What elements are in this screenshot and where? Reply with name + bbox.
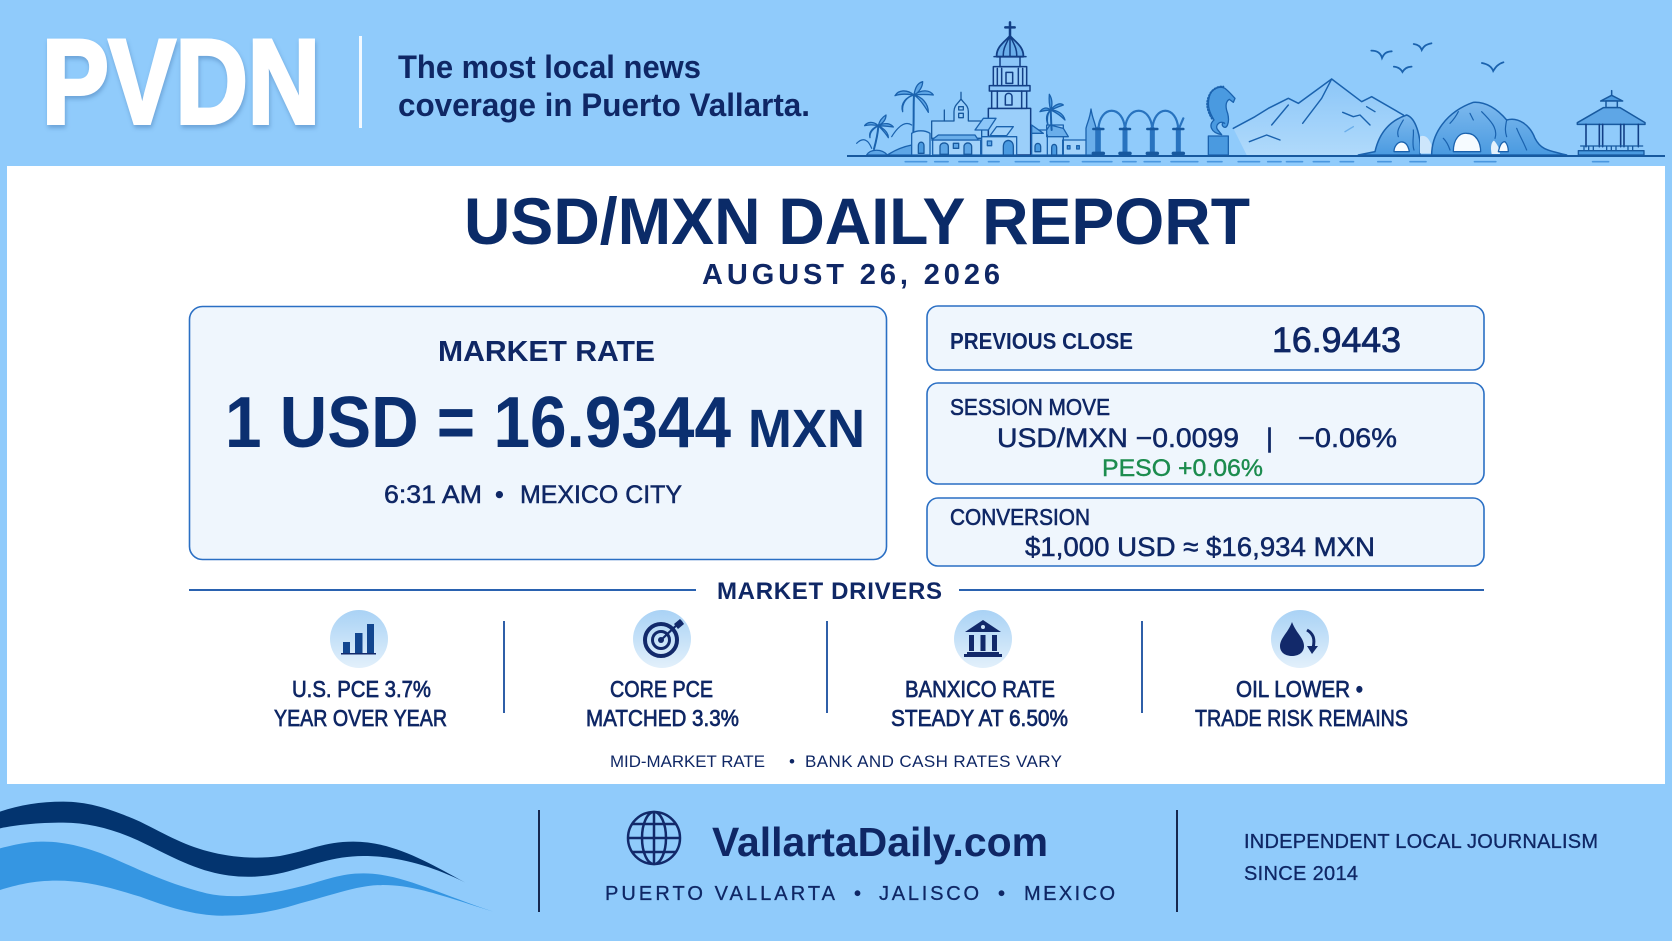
gazebo <box>1611 91 1613 96</box>
location line: • <box>854 883 861 905</box>
driver text: TRADE RISK REMAINS <box>1195 705 1408 731</box>
footnote <box>610 752 1062 771</box>
large rock <box>1420 102 1567 155</box>
main tower <box>988 108 1031 155</box>
illustration: Puerto Vallarta skyline <box>847 22 1665 162</box>
logo: PVDN: PVDN <box>42 15 320 149</box>
session move values: −0.06% <box>1298 423 1397 453</box>
driver text: U.S. PCE 3.7% <box>292 676 431 702</box>
panel: market rate <box>190 306 886 560</box>
tagline: The most local news <box>398 49 701 85</box>
session move values: USD/MXN −0.0099 <box>997 423 1239 453</box>
location line: PUERTO VALLARTA <box>605 883 836 905</box>
left chapel <box>912 131 930 155</box>
peso change: PESO +0.06% <box>1102 455 1263 482</box>
palm trunks <box>874 95 914 149</box>
location line: MEXICO <box>1024 883 1115 905</box>
footer divider left <box>538 810 540 912</box>
timestamp: • <box>495 481 504 509</box>
timestamp: 6:31 AM <box>384 481 482 509</box>
icon: bar chart <box>330 610 388 668</box>
independent journalism note <box>1244 831 1598 885</box>
driver: U.S. PCE <box>274 610 447 731</box>
market rate unit: MXN <box>748 399 865 459</box>
small rock <box>1358 115 1420 155</box>
conversion value: $1,000 USD ≈ $16,934 MXN <box>1025 532 1375 562</box>
driver text: OIL LOWER • <box>1236 676 1363 702</box>
icon: bank <box>954 610 1012 668</box>
market rate label: MARKET RATE <box>438 336 655 368</box>
heading: market drivers: MARKET DRIVERS <box>717 578 942 605</box>
driver: oil and trade <box>1195 610 1408 731</box>
driver text: STEADY AT 6.50% <box>891 705 1068 731</box>
driver text: YEAR OVER YEAR <box>274 705 447 731</box>
footer waves <box>0 802 493 916</box>
driver: Banxico rate <box>891 610 1068 731</box>
driver text: MATCHED 3.3% <box>586 705 739 731</box>
driver text: BANXICO RATE <box>905 676 1055 702</box>
tower roofs <box>975 118 996 130</box>
driver text <box>586 676 739 731</box>
panel: conversion <box>927 498 1484 566</box>
driver: Core PCE <box>586 610 739 731</box>
location line: • <box>998 883 1005 905</box>
icon: globe <box>628 812 680 864</box>
birds <box>905 43 1609 162</box>
footer divider right <box>1176 810 1178 912</box>
market rate value: 1 USD = 16.9344 <box>225 383 731 463</box>
mountain <box>1233 79 1420 155</box>
icon: target <box>633 610 691 668</box>
title: USD/MXN DAILY REPORT <box>464 184 1250 258</box>
driver text <box>274 676 447 731</box>
location line: JALISCO <box>879 883 979 905</box>
footnote: BANK AND CASH RATES VARY <box>805 752 1062 771</box>
white sky gap between rocks <box>1420 136 1433 153</box>
previous close value: 16.9443 <box>1272 321 1401 360</box>
small church tower and nave <box>932 92 982 138</box>
icon: oil drop with down arrow <box>1271 610 1329 668</box>
seahorse <box>1208 87 1235 135</box>
hills <box>857 124 912 148</box>
skyline: seahorse, mountains, rocks and gazebo <box>1207 79 1645 155</box>
ground line <box>847 155 1665 157</box>
tagline <box>398 49 810 123</box>
footnote: • <box>789 752 795 771</box>
timestamp <box>384 481 682 509</box>
nave front <box>933 140 981 155</box>
independent journalism note: INDEPENDENT LOCAL JOURNALISM <box>1244 831 1598 853</box>
session move values <box>997 423 1397 453</box>
website name: VallartaDaily.com <box>712 819 1048 865</box>
date: AUGUST 26, 2026 <box>702 259 1000 291</box>
malecon arches <box>1086 109 1096 155</box>
pedestal <box>1208 136 1228 155</box>
panel: session move <box>927 383 1484 484</box>
right buildings and palm <box>1032 125 1063 155</box>
independent journalism note: SINCE 2014 <box>1244 863 1358 885</box>
skyline: church, palms and malecon arches <box>857 22 1183 155</box>
driver text <box>1195 676 1408 731</box>
previous close label: PREVIOUS CLOSE <box>950 328 1133 354</box>
timestamp: MEXICO CITY <box>520 481 682 509</box>
session move values: | <box>1266 423 1273 453</box>
driver text: CORE PCE <box>610 676 713 702</box>
header divider <box>359 36 362 128</box>
driver text <box>891 676 1068 731</box>
footnote: MID-MARKET RATE <box>610 752 765 771</box>
panel: previous close <box>927 306 1484 370</box>
main white panel <box>7 166 1665 784</box>
conversion label: CONVERSION <box>950 504 1090 530</box>
tagline: coverage in Puerto Vallarta. <box>398 87 810 123</box>
location line <box>605 883 1115 905</box>
session move label: SESSION MOVE <box>950 394 1110 420</box>
